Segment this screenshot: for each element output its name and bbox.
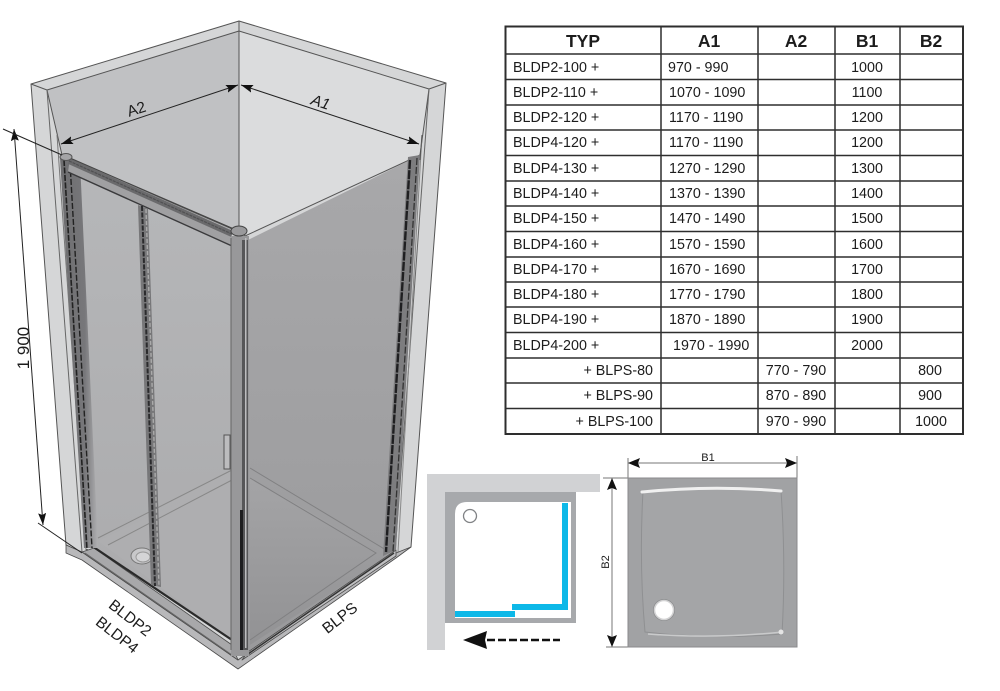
drain circle bbox=[464, 510, 476, 522]
left wall post bbox=[60, 158, 98, 550]
walls bbox=[31, 21, 446, 660]
dimension A1 bbox=[241, 85, 422, 160]
table header: B1 bbox=[856, 31, 878, 51]
column A1: 1270 - 1290 bbox=[669, 161, 745, 177]
column TYP: BLDP4-120 + bbox=[513, 135, 599, 151]
tray interior bbox=[455, 502, 571, 618]
column B1: 1300 bbox=[851, 161, 883, 177]
centre post bbox=[60, 154, 249, 656]
shower tray top view bbox=[628, 478, 797, 647]
column A2 bbox=[766, 363, 826, 430]
column B2: 800 bbox=[918, 363, 942, 379]
column A1: 1770 - 1790 bbox=[669, 287, 745, 303]
base threshold bbox=[66, 545, 411, 669]
column TYP: BLDP4-190 + bbox=[513, 312, 599, 328]
column A1: 1070 - 1090 bbox=[669, 85, 745, 101]
column B1: 1200 bbox=[851, 135, 883, 151]
table header: A2 bbox=[785, 31, 807, 51]
column A1: 1970 - 1990 bbox=[673, 338, 749, 354]
column A1: 1170 - 1190 bbox=[669, 135, 743, 151]
table header: B2 bbox=[920, 31, 942, 51]
column TYP: BLDP4-140 + bbox=[513, 186, 599, 202]
column A1: 1470 - 1490 bbox=[669, 211, 745, 227]
column B1: 1700 bbox=[851, 262, 883, 278]
column B2 bbox=[915, 363, 947, 430]
column B1 bbox=[851, 60, 883, 354]
column A1: 1870 - 1890 bbox=[669, 312, 745, 328]
column B2: 900 bbox=[918, 388, 942, 404]
column TYP: + BLPS-90 bbox=[583, 388, 653, 404]
column A1: 1170 - 1190 bbox=[669, 110, 743, 126]
column B2: 1000 bbox=[915, 414, 947, 430]
table header: A1 bbox=[698, 31, 720, 51]
dimension 1900 bbox=[3, 129, 82, 553]
door handle bbox=[224, 435, 230, 469]
column B1: 1200 bbox=[851, 110, 883, 126]
column TYP: BLDP4-180 + bbox=[513, 287, 599, 303]
labels BLDP2 BLDP4: BLDP4 bbox=[92, 614, 142, 657]
column A1: 970 - 990 bbox=[668, 60, 728, 76]
labels BLDP2 BLDP4 bbox=[92, 597, 154, 657]
column A1: 1670 - 1690 bbox=[669, 262, 745, 278]
column TYP: BLDP4-150 + bbox=[513, 211, 599, 227]
frame bbox=[445, 492, 576, 623]
column A1 bbox=[668, 60, 749, 354]
dimension 1900: 1 900 bbox=[14, 327, 33, 369]
column TYP bbox=[513, 60, 653, 430]
top rail bbox=[68, 158, 234, 246]
column TYP: BLDP4-160 + bbox=[513, 237, 599, 253]
table header: TYP bbox=[566, 31, 600, 51]
column TYP: BLDP4-170 + bbox=[513, 262, 599, 278]
column B1: 1000 bbox=[851, 60, 883, 76]
column A2: 970 - 990 bbox=[766, 414, 826, 430]
column B1: 1900 bbox=[851, 312, 883, 328]
column B1: 2000 bbox=[851, 338, 883, 354]
column TYP: BLDP2-110 + bbox=[513, 85, 598, 101]
column TYP: + BLPS-100 bbox=[576, 414, 653, 430]
labels BLDP2 BLDP4: BLDP2 bbox=[105, 597, 154, 640]
column TYP: BLDP4-130 + bbox=[513, 161, 599, 177]
dimension A2 bbox=[61, 85, 238, 144]
shower tray floor bbox=[98, 468, 388, 645]
dimension B2: B2 bbox=[600, 555, 612, 569]
right wall post bbox=[383, 155, 420, 556]
middle door bar bbox=[138, 205, 161, 587]
column TYP: BLDP2-100 + bbox=[513, 60, 599, 76]
blue panels bbox=[455, 503, 568, 617]
column A1: 1570 - 1590 bbox=[669, 237, 745, 253]
column A2: 770 - 790 bbox=[766, 363, 826, 379]
wall L shape bbox=[427, 474, 600, 650]
dimension B1: B1 bbox=[701, 452, 715, 464]
column B1: 1500 bbox=[851, 211, 883, 227]
dimension A2: A2 bbox=[125, 99, 148, 121]
label BLPS: BLPS bbox=[319, 600, 361, 637]
column B1: 1800 bbox=[851, 287, 883, 303]
column TYP: BLDP2-120 + bbox=[513, 110, 599, 126]
column TYP: BLDP4-200 + bbox=[513, 338, 599, 354]
column TYP: + BLPS-80 bbox=[583, 363, 653, 379]
dimension A1: A1 bbox=[308, 91, 332, 114]
column B1: 1400 bbox=[851, 186, 883, 202]
tray drain bbox=[653, 599, 675, 621]
table bbox=[505, 26, 963, 434]
shower enclosure 3D drawing bbox=[31, 21, 446, 669]
left door glass bbox=[70, 165, 232, 640]
column A2: 870 - 890 bbox=[766, 388, 826, 404]
table header bbox=[566, 31, 942, 51]
opening arrow bbox=[463, 631, 560, 649]
right fixed panel glass bbox=[248, 160, 410, 652]
plan view diagram bbox=[427, 474, 600, 650]
drain bbox=[131, 548, 153, 564]
column B1: 1600 bbox=[851, 237, 883, 253]
column A1: 1370 - 1390 bbox=[669, 186, 745, 202]
column B1: 1100 bbox=[852, 85, 882, 101]
